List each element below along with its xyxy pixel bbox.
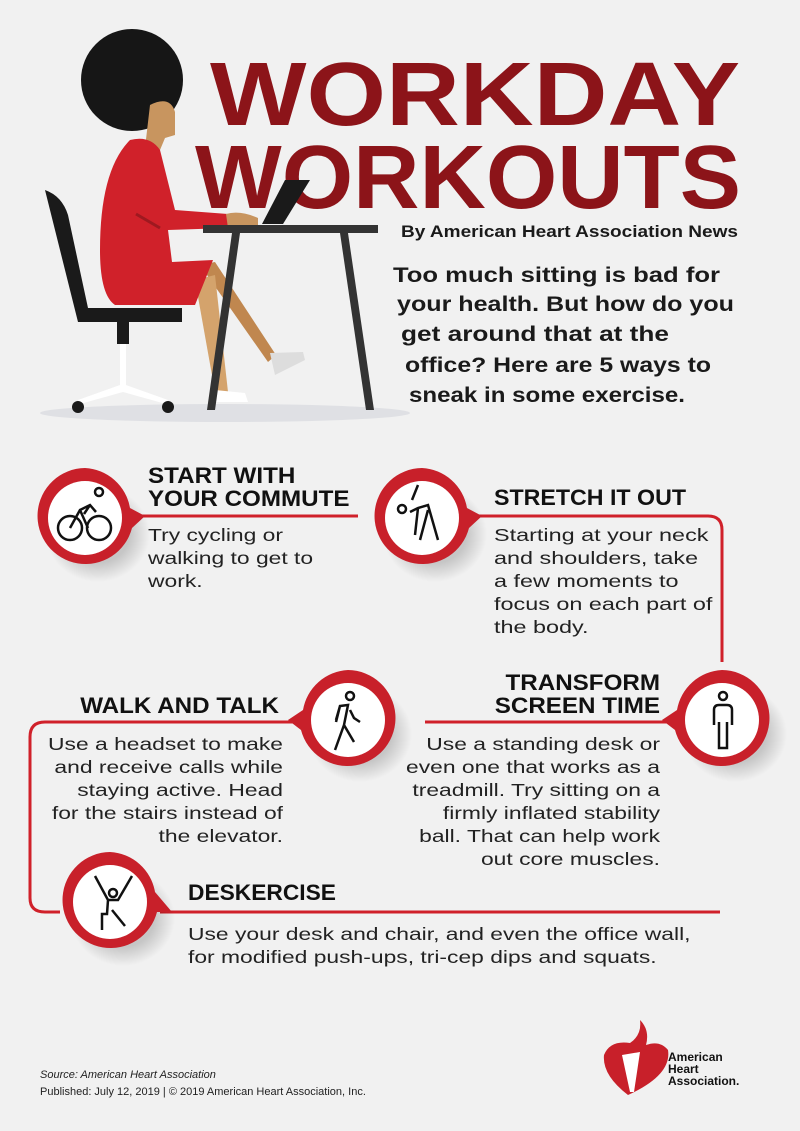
intro text: sneak in some exercise. [409,384,685,407]
step 1: start with your commute [38,463,350,591]
step 4: walk and talk: WALK AND TALK [80,693,279,718]
step 1: start with your commute: work. [147,571,203,591]
title: WORKOUTS [195,128,741,228]
step 2: stretch it out: and shoulders, take [494,548,698,568]
intro text: Too much sitting is bad for [393,264,720,287]
step 4: walk and talk: staying active. Head [77,780,283,800]
step 2: stretch it out: Starting at your neck [494,525,709,545]
step 4: walk and talk: Use a headset to make [48,734,283,754]
intro text [393,264,734,407]
step 5: deskercise [63,852,691,967]
step 3: transform screen time: ball. That can help work [419,826,661,846]
step 5: deskercise: Use your desk and chair, and even the office wall, [188,924,691,944]
step 3: transform screen time: out core muscles. [481,849,660,869]
step 3: transform screen time [406,670,787,869]
step 4: walk and talk: for the stairs instead of [52,803,283,823]
logo: American Heart Association: American [668,1050,723,1064]
step 5: deskercise: DESKERCISE [188,880,336,905]
illustration: woman at desk [40,29,410,422]
step 2: stretch it out: STRETCH IT OUT [494,485,687,510]
step 5: deskercise: for modified push-ups, tri-cep dips and squats. [188,947,657,967]
step 3: transform screen time: even one that works as a [406,757,661,777]
step 1: start with your commute: Try cycling or [148,525,283,545]
icon: standing person [714,692,732,748]
icon: stretch [398,485,438,540]
footer source: Source: American Heart Association [40,1069,216,1081]
step 3: transform screen time: Use a standing desk or [426,734,660,754]
logo: American Heart Association [604,1020,739,1095]
step 2: stretch it out: the body. [494,617,588,637]
logo: American Heart Association: Heart [668,1062,699,1076]
step 3: transform screen time: firmly inflated stability [443,803,661,823]
footer source: Published: July 12, 2019 | © 2019 American Heart Association, Inc. [40,1086,366,1098]
title: WORKDAY [210,45,740,145]
step 2: stretch it out [375,468,713,637]
step 1: start with your commute: YOUR COMMUTE [148,486,350,511]
intro text: your health. But how do you [397,293,734,316]
intro text: get around that at the [401,323,669,346]
step 1: start with your commute: walking to get to [147,548,313,568]
icon: desk exercise [95,876,132,930]
step 4: walk and talk: the elevator. [159,826,283,846]
step 2: stretch it out: focus on each part of [494,594,713,614]
title [195,45,741,228]
intro text: office? Here are 5 ways to [405,354,711,377]
step 3: transform screen time: SCREEN TIME [495,693,660,718]
footer source [40,1069,366,1098]
byline: By American Heart Association News [401,222,738,241]
icon: walking person [335,692,360,750]
step 4: walk and talk: and receive calls while [54,757,283,777]
step 3: transform screen time: treadmill. Try sitting on a [412,780,661,800]
icon: cyclist [58,488,111,540]
connector lines [30,516,722,912]
logo: American Heart Association: Association. [668,1074,739,1088]
step 1: start with your commute: START WITH [148,463,295,488]
step 3: transform screen time: TRANSFORM [506,670,660,695]
step 4: walk and talk [48,670,412,846]
step 2: stretch it out: a few moments to [494,571,679,591]
